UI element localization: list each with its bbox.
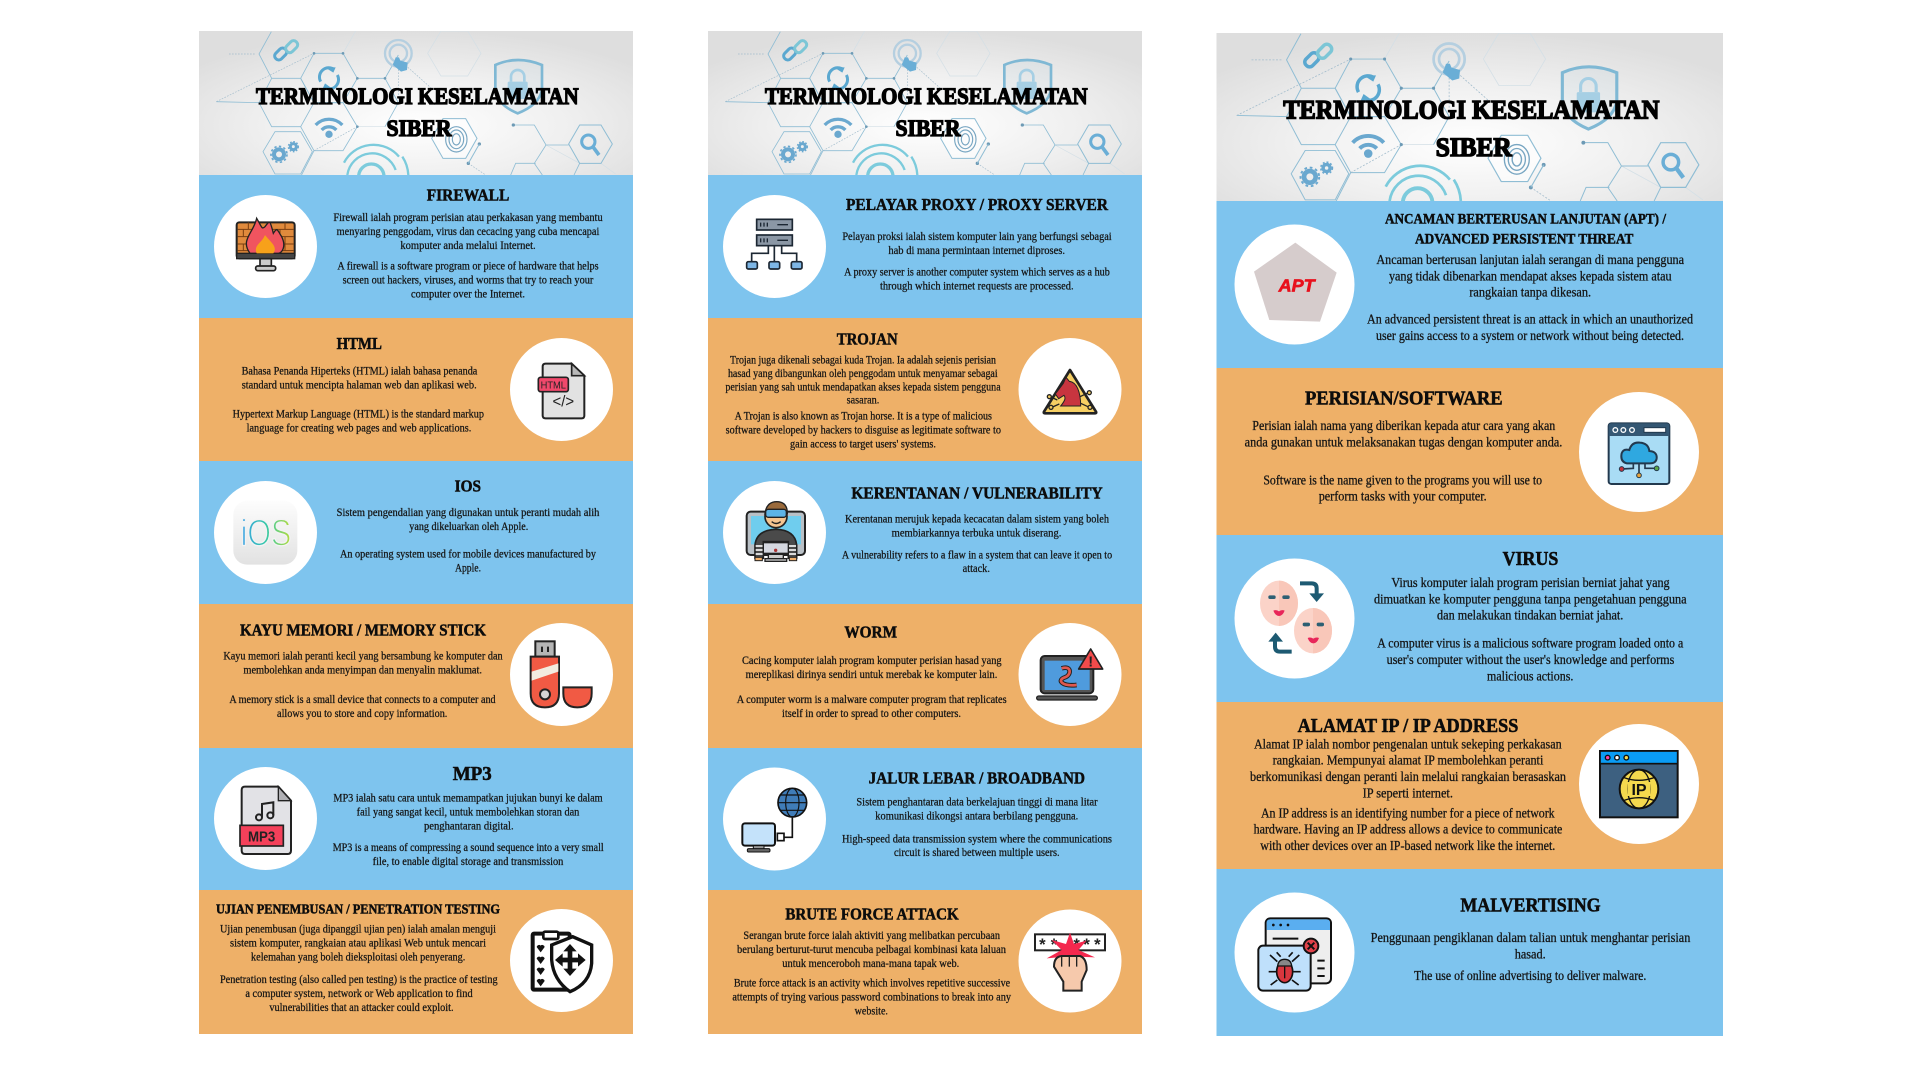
card: html [199,318,633,461]
icon: mp3 file: MP3 [248,829,275,845]
text: virus definition: A computer virus is a malicious software program loaded onto a [1377,636,1683,651]
text: apt definition: rangkaian tanpa dikesan. [1469,285,1591,300]
icon: bug in browser window [1258,918,1331,991]
text: firewall definition: komputer anda melalui Internet. [400,240,536,252]
text: trojan definition: gain access to target users' systems. [790,439,936,451]
text: broadband definition [842,797,1112,859]
icon: two faces with arrows [1260,581,1332,653]
text: ip address definition: hardware. Having an IP address allows a device to communicate [1254,822,1562,837]
text: ip address definition: with other devices over an IP-based network like the internet. [1260,838,1555,853]
text: brute force definition: berulang berturut-turut mencuba pelbagai kombinasi kata laluan [737,944,1006,956]
text: brute force definition: untuk menceroboh mana-mana tapak web. [782,958,959,970]
text: ios definition: Apple. [455,563,481,575]
header background: hexagon technology pattern [199,30,633,189]
text: ip address definition: rangkaian. Mempunyai alamat IP membolehkan peranti [1273,753,1544,768]
text: proxy server definition: A proxy server is another computer system which serves as a hub [844,267,1110,279]
icon: hand pressing password bar: * [1073,935,1080,954]
header: column three [1216,32,1723,218]
text: apt definition: yang tidak dibenarkan mendapat akses kepada sistem atau [1389,268,1672,283]
text: trojan definition: hasad yang dibangunkan oleh penggodam untuk menyamar sebagai [728,368,998,380]
card: mp3 [199,748,633,890]
text: broadband definition: Sistem penghantaran data berkelajuan tinggi di mana litar [856,797,1098,809]
title: column one: SIBER [386,116,452,141]
panel: column three [1216,32,1723,1036]
text: firewall definition: menyaring penggodam, virus dan cecacing yang cuba mencapai [337,226,599,238]
card: malvertising [1216,869,1723,1036]
card: virus [1216,535,1723,702]
text: vulnerability definition: Kerentanan merujuk kepada kecacatan dalam sistem yang boleh [845,513,1109,525]
text: ip address definition: berkomunikasi dengan peranti lain melalui rangkaian berasaskan [1250,769,1566,784]
icon: computer connected to globe [742,788,807,852]
icon: apt pentagon [1254,243,1337,322]
card: brute force attack [708,890,1142,1034]
card: firewall [199,175,633,318]
icon: worm on laptop [1037,649,1103,700]
card: advanced persistent threat [1216,201,1723,368]
text: firewall definition [333,212,603,300]
text: ip address definition: IP seperti internet. [1363,785,1453,800]
heading: advanced persistent threat [1385,211,1667,247]
heading: software: PERISIAN/SOFTWARE [1305,387,1503,409]
heading: memory stick: KAYU MEMORI / MEMORY STICK [240,620,487,639]
heading: broadband: JALUR LEBAR / BROADBAND [869,768,1085,787]
text: vulnerability definition: membiarkannya terbuka untuk diserang. [892,527,1061,539]
icon: hand pressing password bar: * [1094,935,1101,954]
text: software definition: Perisian ialah nama yang diberikan kepada atur cara yang akan [1252,418,1556,433]
title: column three: TERMINOLOGI KESELAMATAN [1283,95,1659,125]
text: trojan definition: sasaran. [847,395,879,407]
title: column three [1283,95,1659,162]
icon: ip globe window [1600,751,1678,817]
text: broadband definition: circuit is shared between multiple users. [894,847,1060,859]
text: penetration testing definition: Ujian penembusan (juga dipanggil ujian pen) ialah amalan menguji [220,924,496,936]
icon: hacker at monitor [747,502,805,561]
text: broadband definition: komunikasi dikongsi antara berbilang pengguna. [875,811,1078,823]
text: worm definition [737,655,1007,720]
text: memory stick definition: membolehkan anda menyimpan dan menyalin maklumat. [243,665,482,677]
title: column two [765,84,1088,141]
text: penetration testing definition [220,924,498,1014]
icon: apt pentagon: APT [1278,276,1317,296]
text: firewall definition: A firewall is a software program or piece of hardware that helps [337,260,599,272]
text: virus definition: user's computer without the user's knowledge and performs [1387,652,1674,667]
title: column one [256,84,579,141]
text: vulnerability definition: attack. [963,563,990,575]
icon: ios logo [233,501,297,565]
icon: trojan knight warning [1044,370,1096,413]
title: column two: SIBER [896,116,961,141]
text: ios definition: yang dikeluarkan oleh Apple. [409,521,528,533]
text: malvertising definition [1371,930,1691,983]
icon: html file: </> [552,393,574,410]
title: column one: TERMINOLOGI KESELAMATAN [256,84,579,109]
panel: column one [199,30,633,1034]
text: apt definition [1367,252,1693,343]
text: html definition: Bahasa Penanda Hiperteks (HTML) ialah bahasa penanda [242,365,477,377]
text: penetration testing definition: a computer system, network or Web application to find [245,988,473,1000]
icon: server network [747,219,802,269]
text: apt definition: Ancaman berterusan lanjutan ialah serangan di mana pengguna [1376,252,1684,267]
text: vulnerability definition [842,513,1112,575]
icon: burning firewall monitor [237,218,295,271]
heading: trojan: TROJAN [837,329,898,348]
text: ios definition: Sistem pengendalian yang digunakan untuk peranti mudah alih [337,507,600,519]
icon: checklist with shield [533,932,592,992]
heading: worm: WORM [844,622,897,641]
text: brute force definition: Serangan brute force ialah aktiviti yang melibatkan percubaan [743,930,1000,942]
icon: mp3 file [240,787,291,854]
text: software definition [1245,418,1562,504]
text: penetration testing definition: kelemahan yang boleh dieksploitasi oleh penyerang. [251,952,465,964]
text: malvertising definition: Penggunaan pengiklanan dalam talian untuk menghantar perisian [1371,930,1691,945]
title: column two: TERMINOLOGI KESELAMATAN [765,84,1088,109]
text: worm definition: itself in order to spread to other computers. [782,708,961,720]
text: broadband definition: High-speed data transmission system where the communications [842,833,1112,845]
text: ip address definition: Alamat IP ialah nombor pengenalan untuk sekeping perkakasan [1254,736,1562,751]
heading: html: HTML [337,334,382,353]
text: brute force definition: website. [855,1005,888,1017]
text: trojan definition: Trojan juga dikenali sebagai kuda Trojan. Ia adalah sejenis perisian [730,355,996,367]
text: ios definition: An operating system used for mobile devices manufactured by [340,549,596,561]
card: trojan [708,318,1142,461]
text: firewall definition: screen out hackers, viruses, and worms that try to reach your [343,274,593,286]
text: html definition [233,365,484,434]
text: software definition: Software is the name given to the programs you will use to [1263,472,1542,487]
text: mp3 definition: file, to enable digital storage and transmission [373,856,564,868]
text: mp3 definition: MP3 is a means of compressing a sound sequence into a very small [333,842,604,854]
text: worm definition: mereplikasi dirinya sendiri untuk merebak ke komputer lain. [746,669,997,681]
text: apt definition: An advanced persistent threat is an attack in which an unauthorized [1367,312,1693,327]
text: mp3 definition [333,792,604,868]
text: ios definition [337,507,600,575]
text: brute force definition [732,930,1011,1017]
text: trojan definition [725,355,1001,451]
text: html definition: Hypertext Markup Language (HTML) is the standard markup [233,408,484,420]
text: proxy server definition: Pelayan proksi ialah sistem komputer lain yang berfungsi sebagai [842,231,1112,243]
icon: hand pressing password bar: * [1083,935,1090,954]
text: ip address definition [1250,736,1566,853]
heading: mp3: MP3 [453,763,492,785]
text: firewall definition: computer over the Internet. [411,288,525,300]
text: software definition: anda gunakan untuk melaksanakan tugas dengan komputer anda. [1245,434,1562,449]
text: virus definition [1374,575,1687,683]
text: worm definition: Cacing komputer ialah program komputer perisian hasad yang [742,655,1002,667]
card: ios [199,461,633,604]
icon: hand pressing password bar: * [1039,935,1046,954]
card: memory stick [199,604,633,748]
text: virus definition: dan melakukan tindakan berniat jahat. [1437,608,1623,623]
text: proxy server definition [842,231,1112,292]
card: broadband [708,748,1142,890]
icon: hand pressing password bar: * [1051,935,1058,954]
icon: html file: HTML [541,380,566,391]
text: html definition: standard untuk mencipta halaman web dan aplikasi web. [242,379,477,391]
text: malvertising definition: The use of online advertising to deliver malware. [1414,968,1646,983]
header background: hexagon technology pattern [708,30,1142,189]
heading: firewall: FIREWALL [427,185,509,204]
heading: proxy server: PELAYAR PROXY / PROXY SERVER [846,195,1109,214]
text: memory stick definition: Kayu memori ialah peranti kecil yang bersambung ke komputer dan [223,651,503,663]
text: virus definition: Virus komputer ialah program perisian berniat jahat yang [1391,575,1670,590]
heading: ios: IOS [455,477,481,496]
text: trojan definition: software developed by hackers to disguise as legitimate software to [726,425,1001,437]
heading: brute force attack: BRUTE FORCE ATTACK [785,904,959,923]
heading: virus: VIRUS [1503,548,1558,570]
heading: advanced persistent threat: ANCAMAN BERTERUSAN LANJUTAN (APT) / [1385,211,1667,227]
text: apt definition: user gains access to a system or network without being detected. [1376,328,1684,343]
card: proxy server [708,175,1142,318]
header: column one [199,30,633,189]
text: mp3 definition: fail yang sangat kecil, untuk membolehkan storan dan [357,806,580,818]
icon: html file [538,364,584,418]
text: proxy server definition: through which internet requests are processed. [880,280,1074,292]
icon: ios logo: iOS [241,511,291,553]
text: memory stick definition: allows you to store and copy information. [277,708,447,720]
heading: penetration testing: UJIAN PENEMBUSAN / PENETRATION TESTING [216,902,500,917]
heading: malvertising: MALVERTISING [1460,894,1601,916]
text: memory stick definition: A memory stick is a small device that connects to a computer and [229,694,496,706]
header background: hexagon technology pattern [1216,32,1723,218]
icon: hand pressing password bar [1035,933,1105,991]
heading: ip address: ALAMAT IP / IP ADDRESS [1298,715,1518,737]
heading: advanced persistent threat: ADVANCED PERSISTENT THREAT [1415,231,1633,247]
card: penetration testing [199,890,633,1034]
text: vulnerability definition: A vulnerability refers to a flaw in a system that can leave it open to [842,549,1112,561]
text: proxy server definition: hab di mana permintaan internet diproses. [888,245,1065,257]
card: software [1216,368,1723,535]
card: worm [708,604,1142,748]
icon: worm on laptop: ! [1088,655,1093,671]
icon: cloud software window [1609,423,1669,484]
card: vulnerability [708,461,1142,604]
card: ip address [1216,702,1723,869]
text: mp3 definition: MP3 ialah satu cara untuk memampatkan jujukan bunyi ke dalam [333,792,603,804]
text: memory stick definition [223,651,503,720]
text: firewall definition: Firewall ialah program perisian atau perkakasan yang membantu [333,212,603,224]
text: penetration testing definition: vulnerabilities that an attacker could exploit. [269,1002,454,1014]
text: virus definition: malicious actions. [1487,668,1573,683]
heading: vulnerability: KERENTANAN / VULNERABILITY [851,483,1103,502]
header: column two [708,30,1142,189]
text: malvertising definition: hasad. [1515,946,1546,961]
text: ip address definition: An IP address is an identifying number for a piece of network [1261,805,1555,820]
text: software definition: perform tasks with your computer. [1319,489,1487,504]
text: trojan definition: perisian yang sah untuk mendapatkan akses kepada sistem pengguna [725,381,1001,393]
title: column three: SIBER [1436,132,1513,162]
icon: ip globe window: IP [1631,782,1647,799]
text: brute force definition: attempts of trying various password combinations to break into any [732,991,1011,1003]
text: virus definition: dimuatkan ke komputer pengguna tanpa pengetahuan pengguna [1374,591,1687,606]
text: mp3 definition: penghantaran digital. [424,820,514,832]
text: penetration testing definition: Penetration testing (also called pen testing) is the practice of testing [220,974,498,986]
text: brute force definition: Brute force attack is an activity which involves repetitive successive [734,977,1010,989]
icon: usb stick [531,641,592,707]
text: worm definition: A computer worm is a malware computer program that replicates [737,694,1007,706]
panel: column two [708,30,1142,1034]
text: trojan definition: A Trojan is also known as Trojan horse. It is a type of malicious [735,411,992,423]
text: penetration testing definition: sistem komputer, rangkaian atau aplikasi Web untuk mencari [230,938,486,950]
text: html definition: language for creating web pages and web applications. [247,422,471,434]
